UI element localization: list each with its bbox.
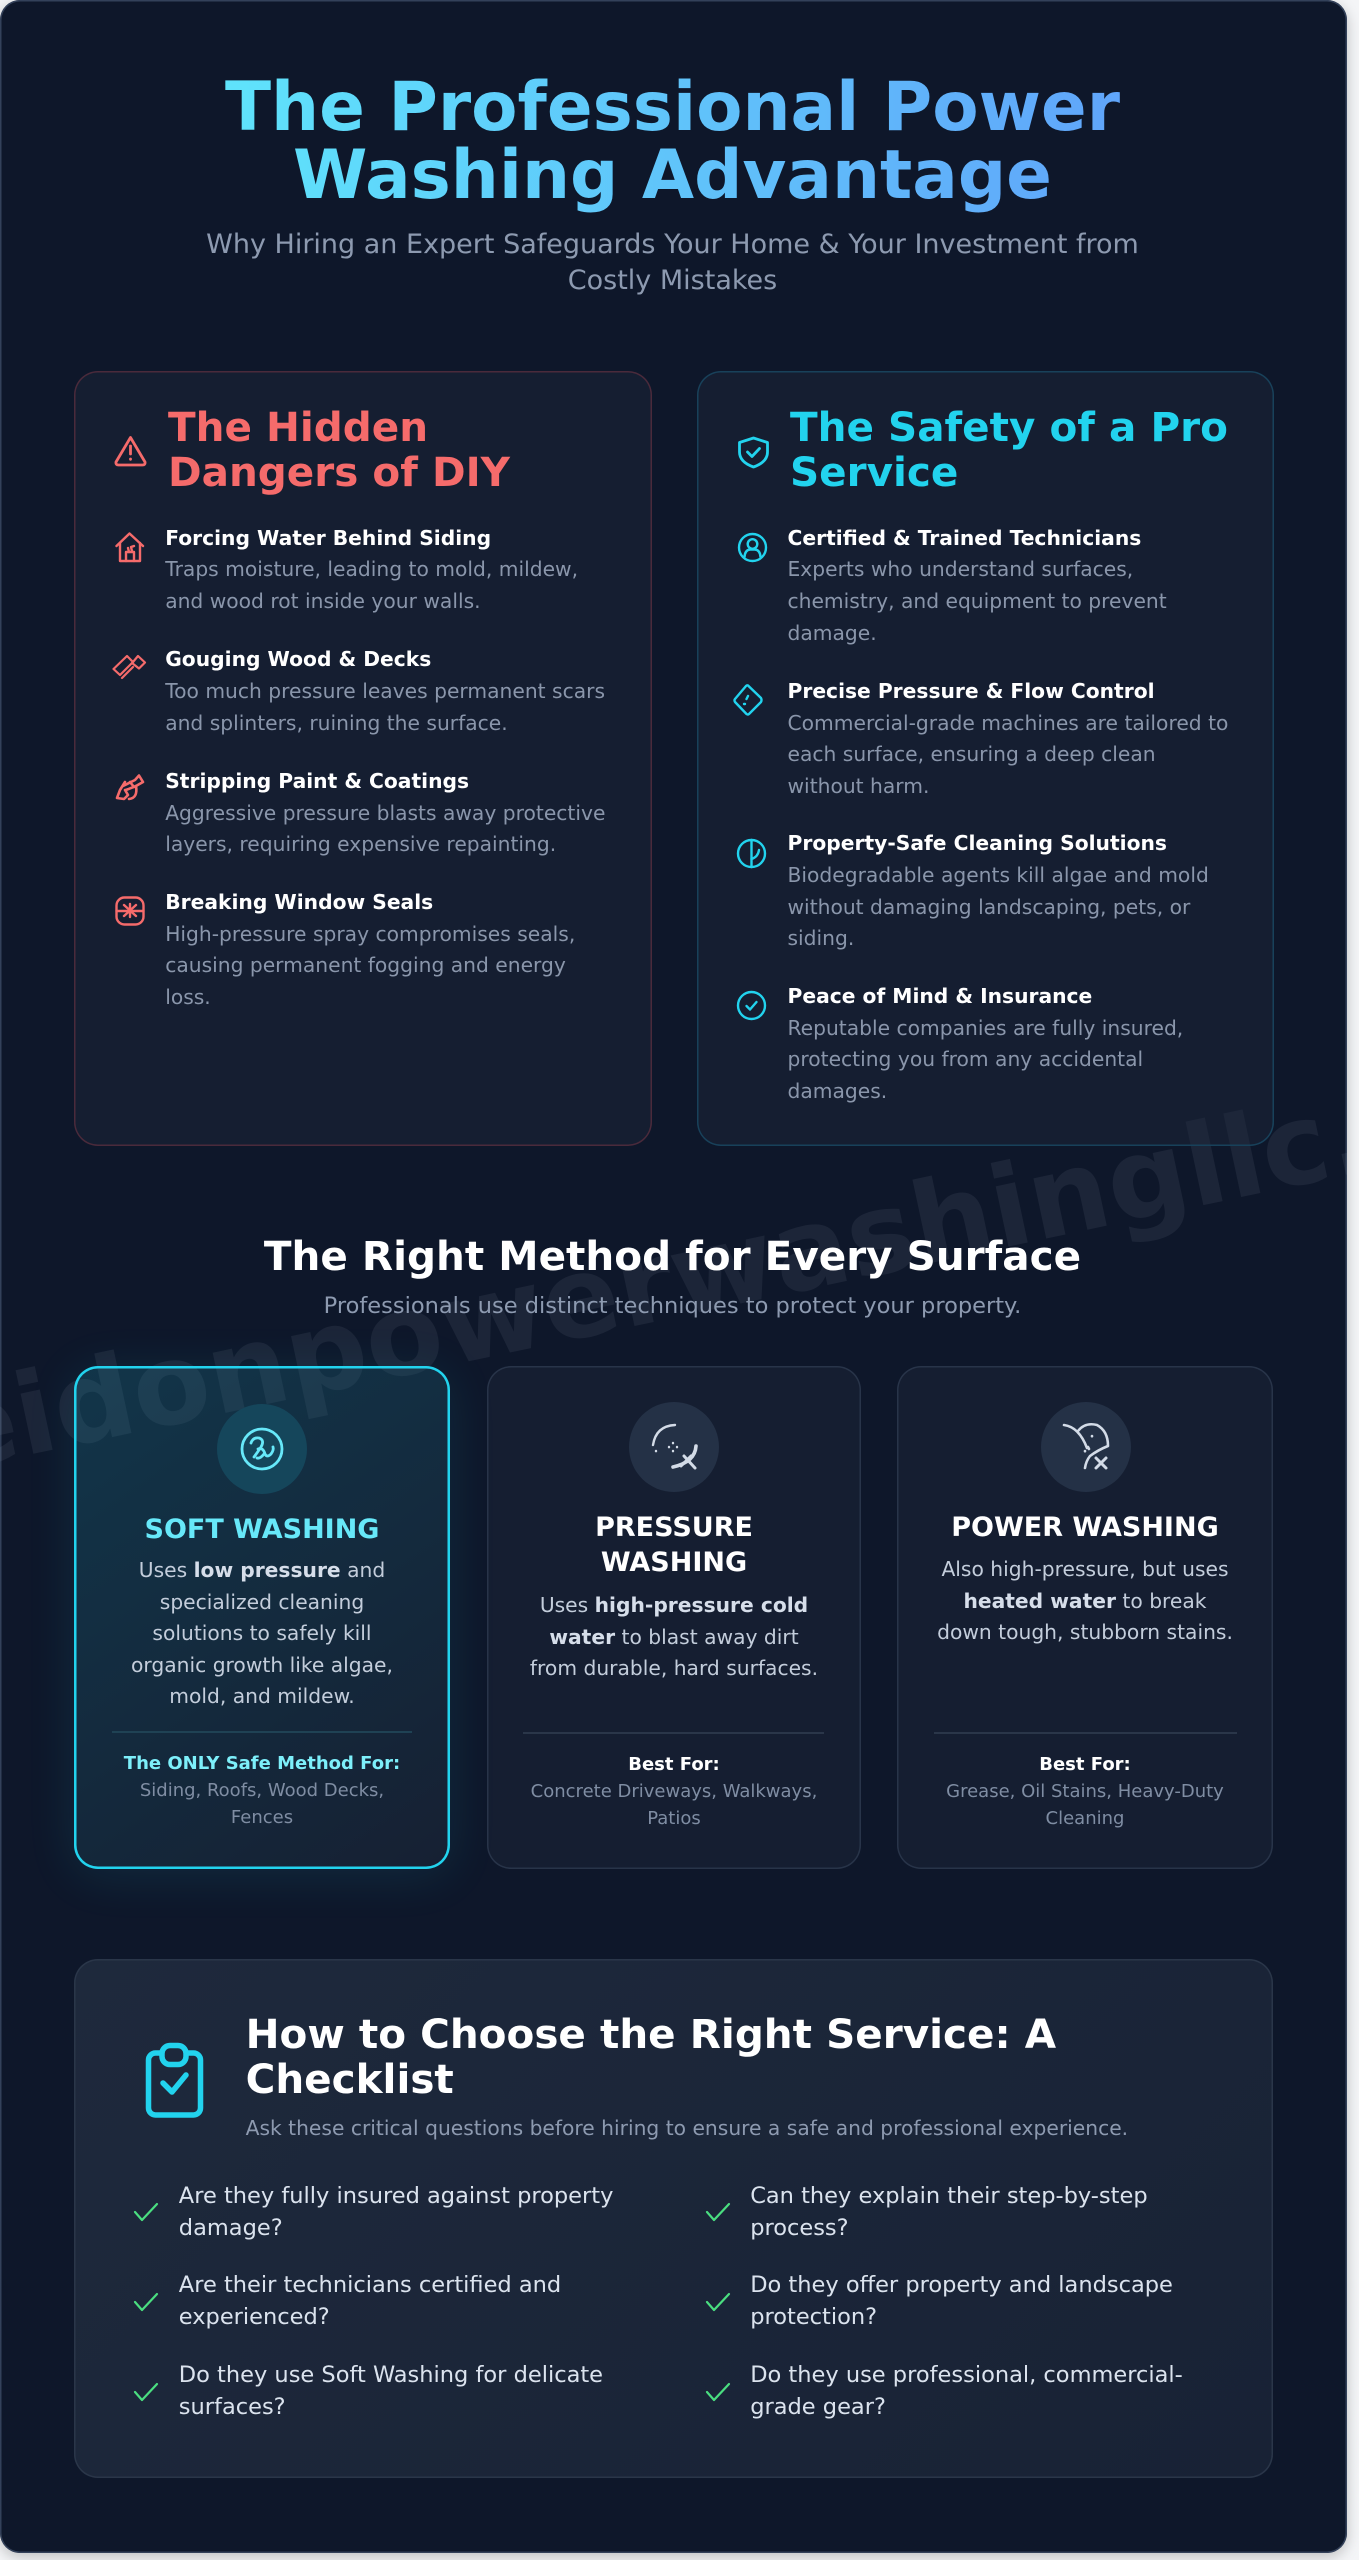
safety list item 2: Precise Pressure & Flow Control xyxy=(788,679,1155,703)
card: power washing xyxy=(897,1366,1273,1869)
checklist question 1 xyxy=(179,2183,613,2240)
icon: broken window seal xyxy=(115,896,145,926)
card: pressure washing xyxy=(487,1366,861,1869)
checklist question 6 xyxy=(750,2360,1183,2424)
panel heading: Dangers of DIY xyxy=(168,448,510,496)
title: Washing Advantage xyxy=(293,135,1052,214)
safety list item 3: without damaging landscaping, pets, or xyxy=(788,895,1190,919)
safety list item 2: without harm. xyxy=(788,774,929,798)
safety list item 3: Biodegradable agents kill algae and mold xyxy=(788,863,1209,887)
checklist question 4: Can they explain their step-by-step xyxy=(750,2183,1148,2209)
panel heading: Service xyxy=(790,448,958,496)
icon bubble: power wash xyxy=(1041,1402,1131,1492)
card description: mold, and mildew. xyxy=(169,1684,355,1708)
check icon 5 xyxy=(706,2292,730,2312)
dangers list item 3 xyxy=(165,769,605,856)
panel: hidden dangers of DIY xyxy=(74,371,652,1146)
icon: check circle xyxy=(736,990,766,1020)
safety list item 3: Property-Safe Cleaning Solutions xyxy=(788,831,1167,855)
checklist question 6: grade gear? xyxy=(750,2394,886,2420)
panel: safety of a pro service xyxy=(697,371,1274,1146)
card description: heated water to break xyxy=(963,1589,1207,1613)
checklist question 6: Do they use professional, commercial- xyxy=(750,2362,1183,2388)
safety list item 1: chemistry, and equipment to prevent xyxy=(788,589,1167,613)
icon bubble: pressure wash xyxy=(629,1402,719,1492)
checklist heading xyxy=(246,2010,1056,2103)
best-for note: Grease, Oil Stains, Heavy-Duty xyxy=(946,1781,1224,1802)
checklist question 1: damage? xyxy=(179,2214,283,2240)
card description: organic growth like algae, xyxy=(131,1652,393,1676)
card description: solutions to safely kill xyxy=(152,1621,372,1645)
checklist question 2: experienced? xyxy=(179,2304,330,2330)
title xyxy=(225,67,1120,214)
panel heading: The Hidden xyxy=(168,403,428,451)
safety list item 1: Experts who understand surfaces, xyxy=(788,557,1133,581)
icon: stripped paint brush xyxy=(116,774,144,800)
dangers list item 1: Forcing Water Behind Siding xyxy=(165,526,491,550)
best-for note: Best For: xyxy=(1039,1754,1131,1775)
card heading: PRESSURE xyxy=(595,1512,753,1543)
safety list item 1: Certified & Trained Technicians xyxy=(788,526,1141,550)
checklist heading: How to Choose the Right Service: A xyxy=(246,2010,1056,2058)
safety list item 4: protecting you from any accidental xyxy=(788,1047,1143,1071)
checklist question 3: Do they use Soft Washing for delicate xyxy=(179,2362,603,2388)
card heading: WASHING xyxy=(601,1547,747,1578)
dangers list item 3: Aggressive pressure blasts away protective xyxy=(165,801,605,825)
safety list item 4: Reputable companies are fully insured, xyxy=(788,1016,1183,1040)
best-for note xyxy=(531,1754,817,1829)
dangers list item 3: Stripping Paint & Coatings xyxy=(165,769,469,793)
panel heading: The Safety of a Pro xyxy=(790,403,1228,451)
dangers list item 1 xyxy=(165,526,578,613)
safety list item 4: Peace of Mind & Insurance xyxy=(788,984,1092,1008)
checklist question 3 xyxy=(179,2362,603,2420)
panel heading xyxy=(790,403,1228,496)
best-for note xyxy=(946,1754,1224,1829)
subtitle: Costly Mistakes xyxy=(568,265,777,296)
safety list item 4: damages. xyxy=(788,1079,887,1103)
card description: Uses low pressure and xyxy=(139,1558,385,1582)
checklist question 2 xyxy=(179,2272,561,2330)
dangers list item 4: causing permanent fogging and energy xyxy=(165,953,566,977)
checklist question 4: process? xyxy=(750,2214,849,2240)
checklist subheading: Ask these critical questions before hiring to ensure a safe and professional experience. xyxy=(246,2116,1128,2140)
section subheading: Professionals use distinct techniques to protect your property. xyxy=(324,1293,1021,1319)
checklist question 5: Do they offer property and landscape xyxy=(750,2272,1173,2298)
check icon 3 xyxy=(134,2382,158,2402)
card heading xyxy=(595,1512,753,1578)
dangers list item 4 xyxy=(165,890,575,1009)
icon: clipboard check xyxy=(146,2042,204,2118)
best-for note: Cleaning xyxy=(1046,1808,1124,1829)
dangers list item 2: Gouging Wood & Decks xyxy=(165,647,431,671)
best-for note: Patios xyxy=(647,1808,701,1829)
checklist question 4 xyxy=(750,2183,1148,2240)
icon: leaf in circle xyxy=(736,838,766,868)
dangers list item 3: layers, requiring expensive repainting. xyxy=(165,832,556,856)
dangers list item 2 xyxy=(165,647,605,735)
title: The Professional Power xyxy=(225,67,1120,146)
dangers list item 2: and splinters, ruining the surface. xyxy=(165,711,508,735)
safety list item 4 xyxy=(788,984,1183,1103)
best-for note: Fences xyxy=(231,1807,293,1828)
checklist question 2: Are their technicians certified and xyxy=(179,2272,561,2298)
panel heading xyxy=(168,403,510,496)
subtitle: Why Hiring an Expert Safeguards Your Home & Your Investment from xyxy=(206,229,1139,260)
safety list item 2: Commercial-grade machines are tailored to xyxy=(788,711,1228,735)
card: soft washing xyxy=(74,1366,450,1869)
safety list item 2 xyxy=(788,679,1228,798)
card description xyxy=(131,1558,393,1708)
card heading: SOFT WASHING xyxy=(144,1514,379,1544)
subtitle xyxy=(206,229,1139,296)
icon: house xyxy=(115,532,144,562)
icon: shield check xyxy=(738,436,769,468)
icon: gouged plank xyxy=(112,654,146,680)
icon bubble: soft wash xyxy=(217,1404,307,1494)
card description: from durable, hard surfaces. xyxy=(530,1656,818,1680)
card heading: POWER WASHING xyxy=(951,1512,1219,1543)
safety list item 3: siding. xyxy=(788,926,854,950)
check icon 4 xyxy=(706,2202,730,2222)
dangers list item 4: loss. xyxy=(165,985,211,1009)
section heading: The Right Method for Every Surface xyxy=(264,1232,1081,1280)
best-for note: Siding, Roofs, Wood Decks, xyxy=(140,1780,384,1801)
check icon 1 xyxy=(134,2202,158,2222)
card description: down tough, stubborn stains. xyxy=(937,1620,1233,1644)
checklist question 5 xyxy=(750,2270,1173,2334)
checklist question 5: protection? xyxy=(750,2304,877,2330)
icon: certified technician xyxy=(738,532,768,562)
safety list item 3 xyxy=(788,831,1209,950)
checklist heading: Checklist xyxy=(246,2055,454,2103)
dangers list item 2: Too much pressure leaves permanent scars xyxy=(165,679,605,703)
icon: warning triangle xyxy=(114,436,146,466)
card description xyxy=(937,1557,1233,1644)
card description: water to blast away dirt xyxy=(549,1624,799,1648)
panel: checklist xyxy=(74,1959,1273,2478)
dangers list item 1: Traps moisture, leading to mold, mildew, xyxy=(165,557,578,581)
card description: Uses high-pressure cold xyxy=(540,1593,808,1617)
best-for note: Concrete Driveways, Walkways, xyxy=(531,1781,817,1802)
card description xyxy=(530,1593,818,1680)
best-for note: The ONLY Safe Method For: xyxy=(124,1753,400,1774)
best-for note xyxy=(124,1753,400,1828)
dangers list item 4: High-pressure spray compromises seals, xyxy=(165,922,575,946)
icon: pressure control xyxy=(733,684,763,716)
best-for note: Best For: xyxy=(628,1754,720,1775)
safety list item 2: each surface, ensuring a deep clean xyxy=(788,742,1156,766)
check icon 6 xyxy=(704,2382,730,2402)
card description: Also high-pressure, but uses xyxy=(941,1557,1229,1581)
check icon 2 xyxy=(134,2292,158,2312)
checklist question 3: surfaces? xyxy=(179,2394,286,2420)
dangers list item 1: and wood rot inside your walls. xyxy=(165,589,481,613)
dangers list item 4: Breaking Window Seals xyxy=(165,890,433,914)
safety list item 1: damage. xyxy=(788,621,877,645)
safety list item 1 xyxy=(788,526,1167,645)
checklist question 1: Are they fully insured against property xyxy=(179,2183,613,2209)
card description: specialized cleaning xyxy=(160,1590,364,1614)
